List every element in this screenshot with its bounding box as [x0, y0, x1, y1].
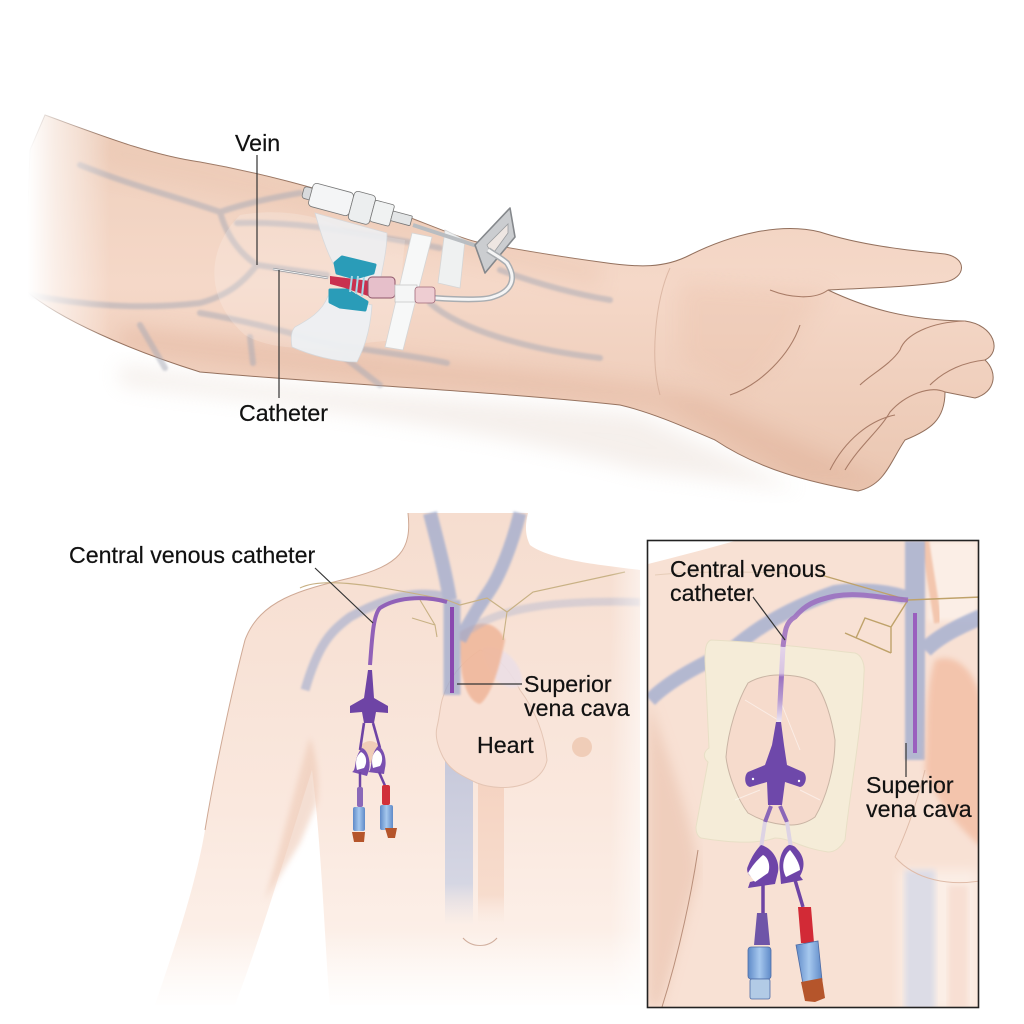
panel: forearm with peripheral IV — [0, 100, 994, 491]
inset heart — [925, 658, 985, 850]
inset lumens — [761, 806, 791, 848]
right fade — [610, 560, 645, 1010]
arm soft shading — [100, 130, 900, 490]
left fade of arm — [0, 100, 110, 400]
label: Superior vena cava (inset): vena cava — [866, 796, 972, 822]
inset border — [648, 540, 978, 1008]
dressing window — [726, 675, 835, 825]
connector: purple lumen — [357, 787, 363, 807]
armpit shading — [265, 737, 318, 900]
leader lines — [315, 568, 373, 623]
inset content — [648, 541, 985, 1010]
label: Central venous catheter (inset): catheter — [670, 580, 754, 606]
small pink connector — [415, 287, 435, 303]
inset hub — [745, 722, 806, 805]
jugular and subclavian veins — [305, 513, 640, 695]
connector: red lumen — [382, 785, 390, 805]
clamp — [475, 208, 515, 273]
top catheter connector — [299, 178, 415, 235]
inset catheter tube — [783, 595, 908, 647]
inset right clamp — [779, 845, 804, 884]
central venous catheter tube — [450, 607, 454, 693]
vertical tape strips — [385, 233, 432, 350]
arm shading — [648, 700, 698, 1007]
dressing glints — [735, 700, 820, 800]
inset veins — [650, 541, 981, 760]
panel: chest with central venous catheter — [69, 513, 645, 1010]
clamps — [352, 748, 370, 776]
label: Catheter: Catheter — [239, 400, 328, 426]
extension tubing loop — [435, 250, 512, 299]
label: Superior vena cava (inset): Superior — [866, 772, 954, 798]
nerves — [821, 575, 981, 653]
right pale area — [928, 541, 978, 621]
label: Heart: Heart — [477, 732, 534, 758]
inset purple connector — [754, 913, 770, 945]
red hub — [330, 276, 370, 296]
panel: inset close-up of catheter dressing — [648, 540, 985, 1010]
tape band over hub — [395, 285, 417, 302]
dressing — [696, 640, 864, 852]
inset leader lines — [753, 597, 785, 640]
catheter hub — [350, 670, 388, 723]
tube to clamp — [413, 225, 477, 246]
leader lines — [256, 155, 258, 265]
aortic arch — [460, 624, 505, 704]
nipples and navel — [572, 737, 592, 757]
nerves / clavicle outline — [300, 572, 625, 612]
label: Superior vena cava: Superior — [524, 671, 612, 697]
hand finger lines — [730, 290, 985, 470]
clear dressing window — [214, 212, 405, 348]
lower dressing wing — [291, 296, 372, 362]
inset left clamp — [747, 845, 778, 888]
torso silhouette — [155, 513, 640, 1005]
heart — [436, 650, 547, 788]
arm shadow — [120, 365, 800, 490]
veins — [30, 165, 610, 385]
label: Central venous catheter (inset): Central venous — [670, 556, 826, 582]
hub stripes — [350, 276, 364, 296]
faint shoulder line — [655, 572, 821, 575]
inset inferior vessels — [905, 870, 935, 1010]
white corner above shoulder — [648, 541, 735, 564]
label: Vein: Vein — [235, 130, 280, 156]
upper dressing wing — [315, 213, 387, 282]
blue butterfly wings — [335, 257, 375, 278]
bottom fade — [150, 930, 645, 1010]
catheter line inside arm — [273, 269, 328, 278]
orange stripe top right — [925, 541, 938, 623]
inset red connector — [798, 907, 814, 943]
label: Superior vena cava: vena cava — [524, 695, 630, 721]
aorta and inferior vena cava — [478, 775, 504, 925]
pulmonary artery — [482, 646, 522, 688]
inset skin — [648, 541, 978, 1007]
label: Central venous catheter: Central venous catheter — [69, 542, 315, 568]
arm and hand silhouette — [25, 115, 994, 491]
pink connector — [368, 277, 395, 298]
inset lumen lines below clamps — [761, 885, 765, 913]
catheter lumens — [360, 723, 380, 750]
